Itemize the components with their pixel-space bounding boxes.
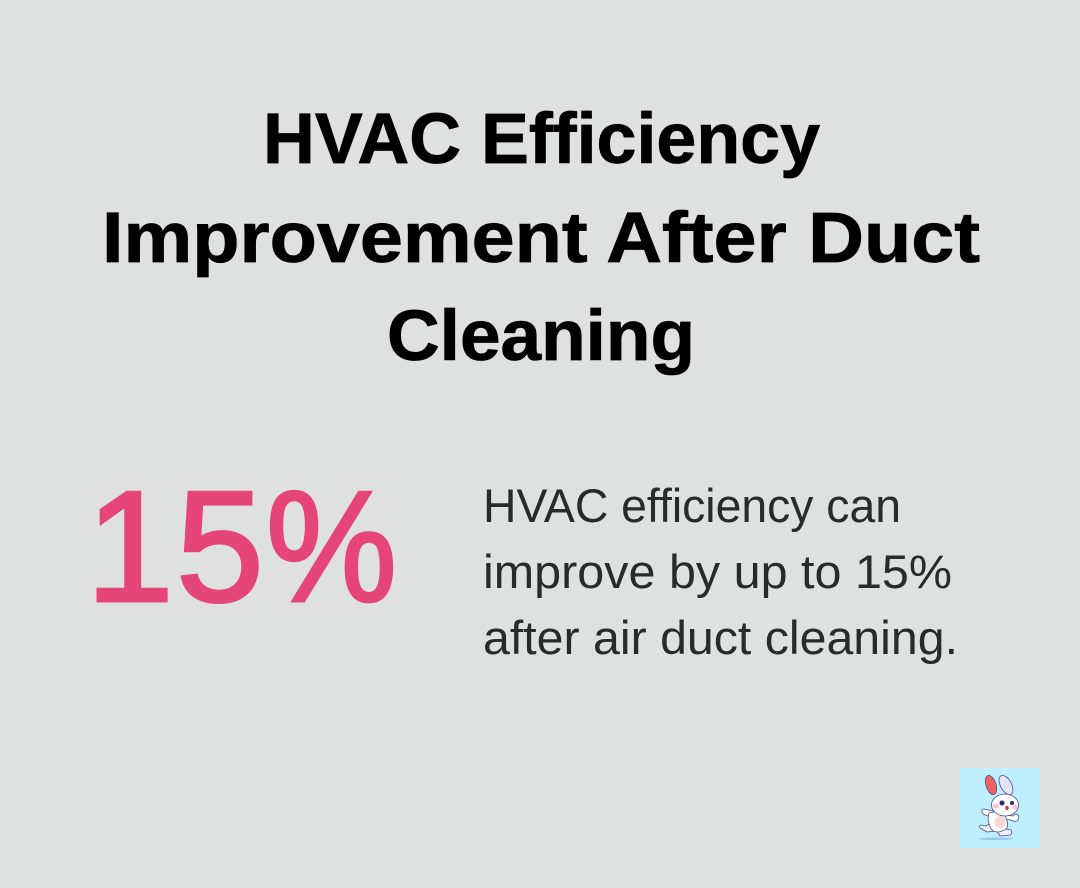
title: Cleaning [387,297,695,376]
title: Improvement After Duct [102,199,980,278]
title [102,100,980,376]
description text [483,479,958,664]
icon: running rabbit logo [960,768,1040,848]
description text: after air duct cleaning. [483,611,958,664]
big stat: 15% [86,459,397,635]
description text: HVAC efficiency can [483,479,901,532]
description text: improve by up to 15% [483,545,952,598]
big stat: 15%: % [266,459,397,635]
title: HVAC Efficiency [263,100,821,179]
big stat: 15%: 15 [86,459,264,635]
